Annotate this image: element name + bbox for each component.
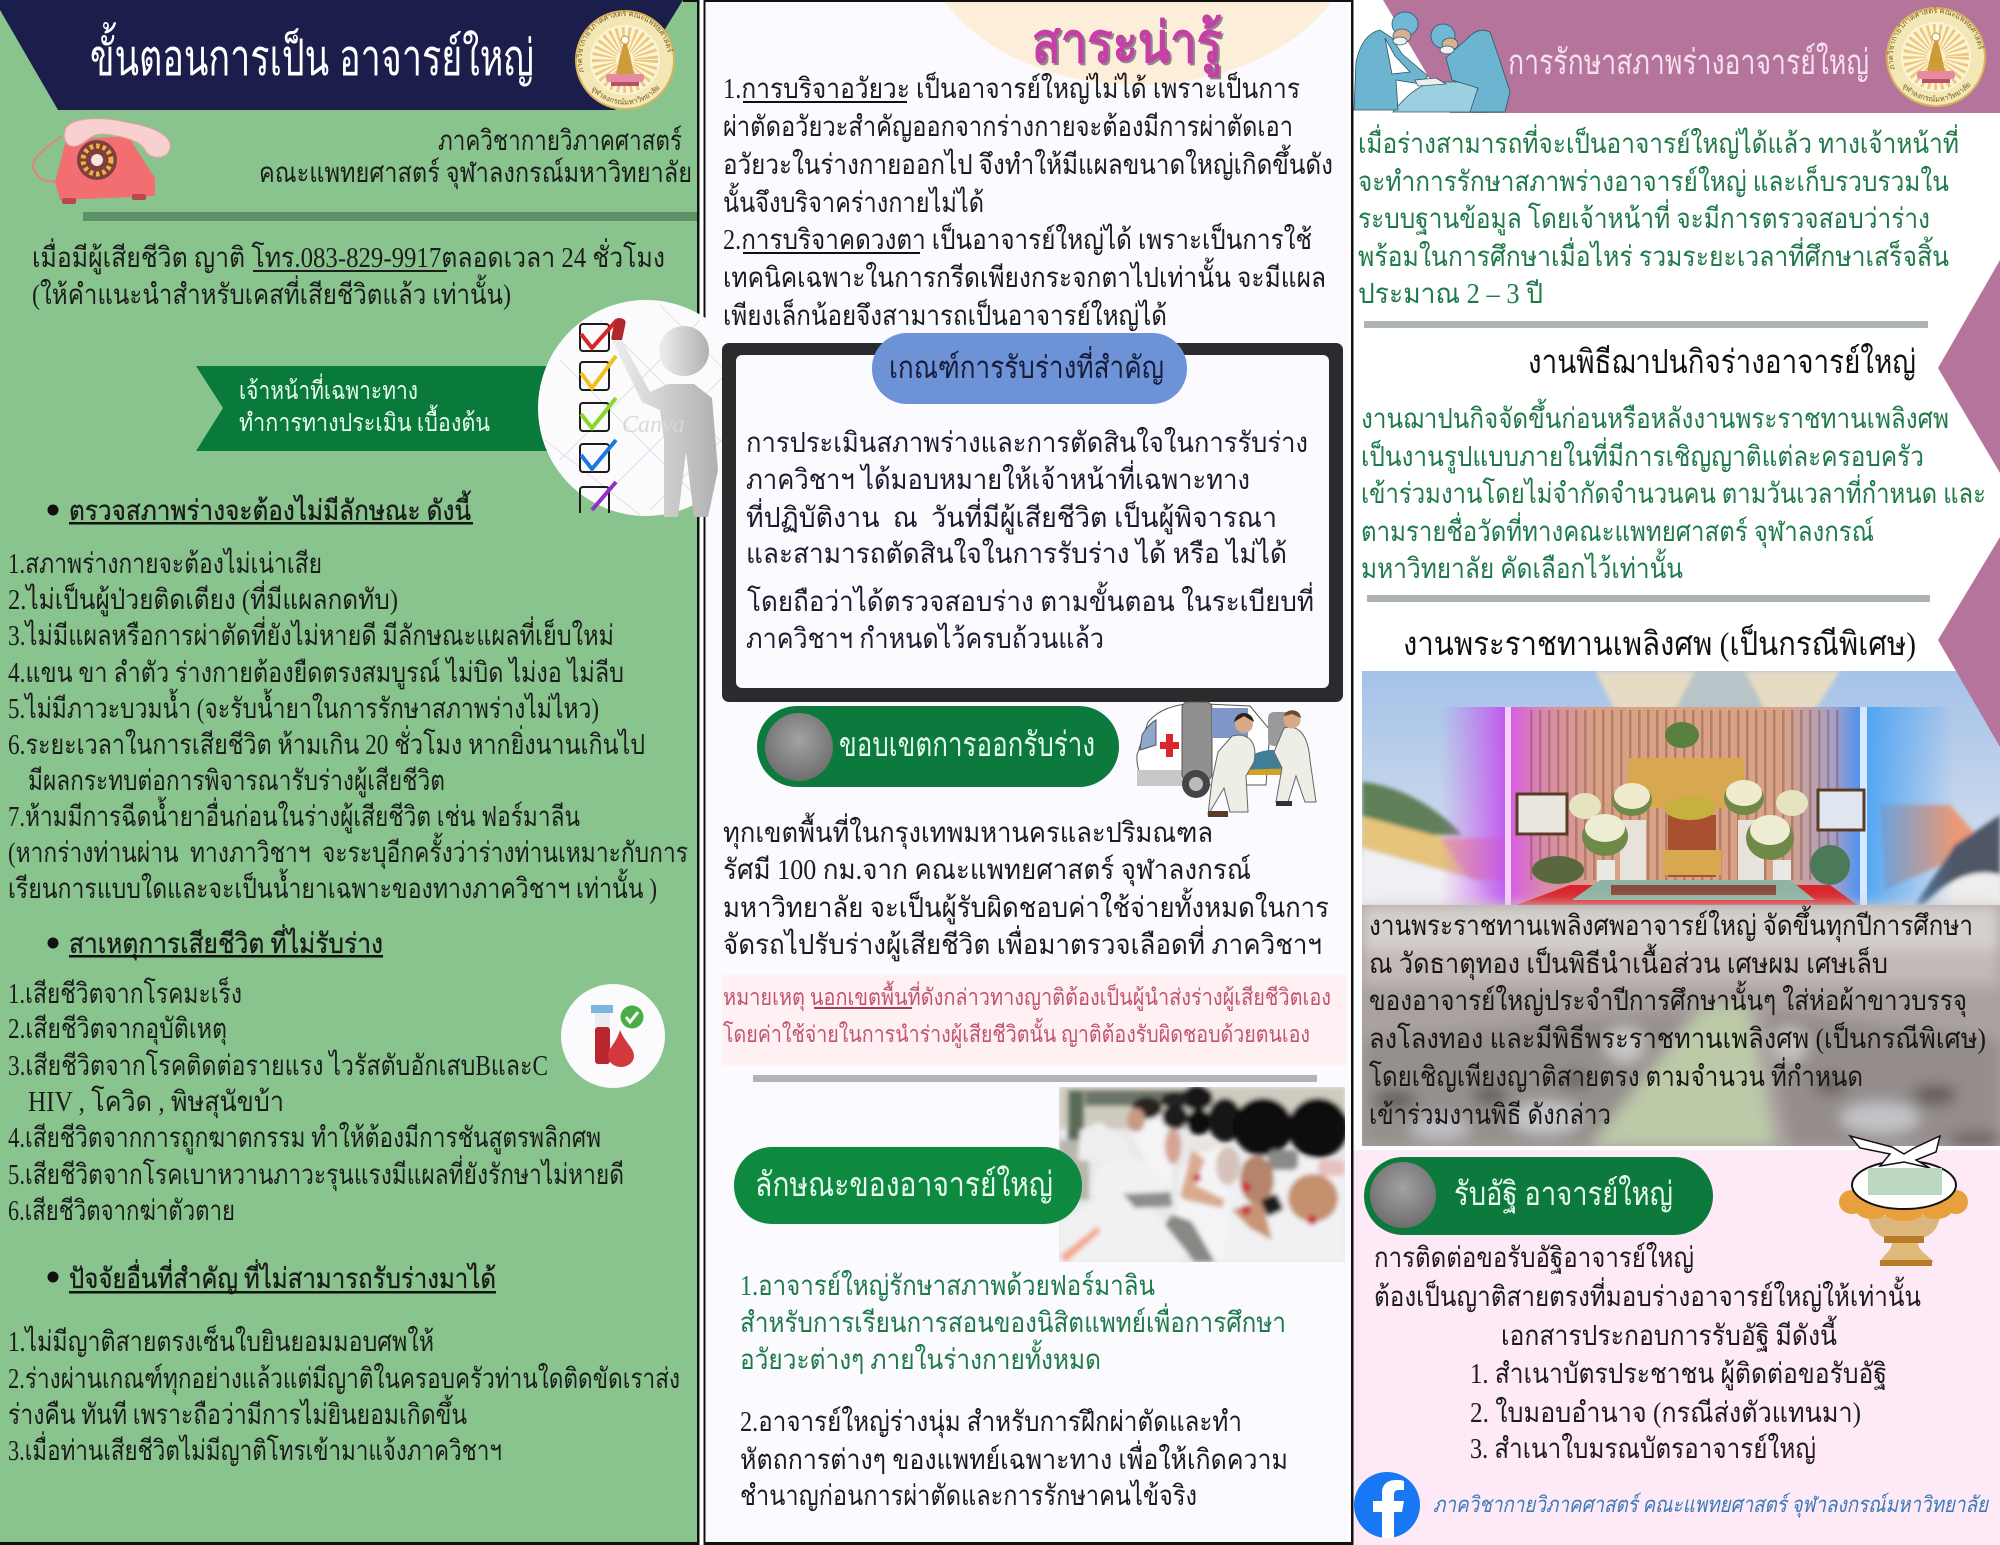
text: ashes documents: การติดต่อขอรับอัฐิอาจารย์ใหญ่	[1374, 1241, 1694, 1274]
list: body conditions: 7.ห้ามมีการฉีดน้ำยาอื่นก่อนในร่างผู้เสียชีวิต เช่น ฟอร์มาลีน	[8, 796, 580, 834]
text: ashes documents: 3. สำเนาใบมรณบัตรอาจารย์ใหญ่	[1470, 1432, 1816, 1465]
illustration: figure ticking checklist	[538, 300, 754, 517]
list: other factors: 1.ไม่มีญาติสายตรงเซ็นใบยินยอมมอบศพให้	[8, 1324, 434, 1358]
text: funeral ceremony: เป็นงานรูปแบบภายในที่มีการเชิญญาติแต่ละครอบครัว	[1361, 437, 1924, 474]
list: body conditions: 4.แขน ขา ลำตัว ร่างกายต้องยืดตรงสมบูรณ์ ไม่บิด ไม่งอ ไม่ลีบ	[8, 657, 624, 690]
list: other factors	[8, 1324, 680, 1467]
title blob	[920, 0, 1356, 85]
title: สาระน่ารู้: สาระน่ารู้	[1034, 13, 1224, 80]
text: donation notes: เทคนิคเฉพาะในการกรีดเพียงกระจกตาไปเท่านั้น จะมีแผล	[723, 257, 1326, 294]
photo: students paying respect	[1059, 1086, 1348, 1262]
heading: other factors: ปัจจัยอื่นที่สำคัญ ที่ไม่สามารถรับร่างมาได้	[69, 1259, 496, 1295]
pill: receive ashes	[1364, 1157, 1713, 1235]
text: donation notes: นั้นจึงบริจาคร่างกายไม่ได้	[723, 182, 984, 219]
note box	[722, 975, 1346, 1065]
list: body conditions: 5.ไม่มีภาวะบวมน้ำ (จะรับน้ำยาในการรักษาสภาพร่างไม่ไหว)	[8, 688, 599, 725]
criteria text: ภาควิชาฯ ได้มอบหมายให้เจ้าหน้าที่เฉพาะทาง	[746, 460, 1250, 496]
list: body conditions: 6.ระยะเวลาในการเสียชีวิต ห้ามเกิน 20 ชั่วโมง หากยิ่งนานเกินไป	[8, 725, 645, 761]
title: สาระน่ารู้: สาระน่ารู้	[1032, 11, 1222, 78]
list: causes of death: HIV , โควิด , พิษสุนัขบ้า	[28, 1085, 284, 1119]
pill: service area	[757, 706, 1119, 787]
icon: ash urn with cloth bundle	[1839, 1136, 1968, 1266]
icon: ambulance	[1137, 702, 1316, 817]
text: donation notes: 2.การบริจาคดวงตา เป็นอาจารย์ใหญ่ได้ เพราะเป็นการใช้	[723, 222, 1312, 256]
ribbon: staff assessment	[196, 366, 560, 451]
panel: centre column content	[722, 0, 1356, 1512]
icon: faculty seal left: ภาควิชากายวิภาคศาสตร์ คณะแพทยศาสตร์	[576, 9, 674, 72]
department address: คณะแพทยศาสตร์ จุฬาลงกรณ์มหาวิทยาลัย	[259, 157, 692, 190]
text: service area: จัดรถไปรับร่างผู้เสียชีวิต เพื่อมาตรวจเลือดที่ ภาควิชาฯ	[723, 925, 1322, 962]
list: other factors: 2.ร่างผ่านเกณฑ์ทุกอย่างแล้วแต่มีญาติในครอบครัวท่านใดติดขัดเราส่ง	[8, 1362, 680, 1396]
panel: centre column background	[704, 0, 1354, 1545]
list: causes of death: 4.เสียชีวิตจากการถูกฆาตกรรม ทำให้ต้องมีการชันสูตรพลิกศพ	[8, 1121, 601, 1155]
criteria text: โดยถือว่าได้ตรวจสอบร่าง ตามขั้นตอน ในระเบียบที่	[747, 581, 1314, 618]
text: service area: มหาวิทยาลัย จะเป็นผู้รับผิดชอบค่าใช้จ่ายทั้งหมดในการ	[723, 887, 1329, 925]
text: royal cremation: เข้าร่วมงานพิธี ดังกล่าว	[1369, 1099, 1611, 1131]
list: body conditions: (หากร่างท่านผ่าน ทางภาวิชาฯ จะระบุอีกครั้งว่าร่างท่านเหมาะกับการ	[8, 832, 688, 870]
pill: service area: ขอบเขตการออกรับร่าง	[839, 727, 1095, 764]
department address	[259, 125, 692, 190]
text: ashes documents	[1374, 1241, 1921, 1465]
criteria text	[746, 426, 1314, 655]
list: other factors: 3.เมื่อท่านเสียชีวิตไม่มีญาติโทรเข้ามาแจ้งภาควิชาฯ	[8, 1431, 502, 1467]
text: characteristic 1: อวัยวะต่างๆ ภายในร่างกายทั้งหมด	[740, 1339, 1101, 1376]
pill: cadaver characteristics	[734, 1147, 1082, 1224]
crowd	[1362, 905, 2000, 1146]
icon: telephone	[33, 119, 170, 204]
list: causes of death: 3.เสียชีวิตจากโรคติดต่อรายแรง ไวรัสตับอักเสบBและC	[8, 1049, 548, 1082]
text: funeral ceremony: มหาวิทยาลัย คัดเลือกไว้เท่านั้น	[1361, 548, 1683, 585]
list: causes of death: 6.เสียชีวิตจากฆ่าตัวตาย	[8, 1195, 235, 1227]
criteria heading pill	[872, 333, 1187, 404]
text: service area: รัศมี 100 กม.จาก คณะแพทยศาสตร์ จุฬาลงกรณ์	[723, 854, 1251, 887]
icon: faculty seal left: จุฬาลงกรณ์มหาวิทยาลัย	[592, 86, 660, 105]
icon: faculty seal right: ภาควิชากายวิภาคศาสตร์ คณะแพทยศาสตร์	[1887, 6, 1985, 70]
ribbon: staff assessment: ทำการทางประเมิน เบื้องต้น	[239, 404, 490, 437]
text: ashes documents: 2. ใบมอบอำนาจ (กรณีส่งตัวแทนมา)	[1470, 1396, 1861, 1429]
icon: surgeons	[1354, 12, 1510, 112]
text: characteristic 2: หัตถการต่างๆ ของแพทย์เฉพาะทาง เพื่อให้เกิดความ	[740, 1440, 1288, 1476]
title: ขั้นตอนการเป็น อาจารย์ใหญ่	[90, 22, 534, 86]
photo: cremation ceremony stage and crowd	[1362, 671, 2000, 1148]
text: characteristic 2: ชำนาญก่อนการผ่าตัดและการรักษาคนไข้จริง	[740, 1480, 1197, 1512]
pill: receive ashes: รับอัฐิ อาจารย์ใหญ่	[1454, 1175, 1673, 1214]
list: body conditions: มีผลกระทบต่อการพิจารณารับร่างผู้เสียชีวิต	[28, 765, 445, 798]
list: causes of death: 1.เสียชีวิตจากโรคมะเร็ง	[8, 976, 242, 1010]
list: body conditions: 1.สภาพร่างกายจะต้องไม่เน่าเสีย	[8, 548, 322, 580]
list: body conditions: 2.ไม่เป็นผู้ป่วยติดเตียง (ที่มีแผลกดทับ)	[8, 580, 398, 617]
pill: cadaver characteristics: ลักษณะของอาจารย์ใหญ่	[755, 1165, 1053, 1204]
text: characteristic 2: 2.อาจารย์ใหญ่ร่างนุ่ม สำหรับการฝึกผ่าตัดและทำ	[740, 1405, 1242, 1439]
text: service area	[723, 812, 1329, 962]
text: characteristic 1	[740, 1269, 1286, 1376]
illustration: figure ticking checklist: Canva	[622, 412, 685, 438]
stage decoration	[1511, 722, 1864, 907]
text: preservation: ประมาณ 2 – 3 ปี	[1358, 278, 1543, 310]
list: causes of death: 2.เสียชีวิตจากอุบัติเหตุ	[8, 1013, 227, 1046]
list: other factors: ร่างคืน ทันที เพราะถือว่ามีการไม่ยินยอมเกิดขึ้น	[8, 1394, 467, 1431]
text: characteristic 1: 1.อาจารย์ใหญ่รักษาสภาพด้วยฟอร์มาลิน	[740, 1269, 1155, 1302]
text: preservation	[1358, 124, 1959, 310]
text: preservation: ระบบฐานข้อมูล โดยเจ้าหน้าที่ จะมีการตรวจสอบว่าร่าง	[1358, 199, 1930, 236]
header banner: mauve	[1383, 0, 2000, 113]
heading: royal cremation: งานพระราชทานเพลิงศพ (เป็นกรณีพิเศษ)	[1403, 624, 1916, 663]
list: causes of death: 5.เสียชีวิตจากโรคเบาหวานภาวะรุนแรงมีแผลที่ยังรักษาไม่หายดี	[8, 1155, 624, 1192]
ribbon: staff assessment: เจ้าหน้าที่เฉพาะทาง	[239, 373, 418, 405]
contact text: เมื่อมีผู้เสียชีวิต ญาติ โทร.083-829-9917ตลอดเวลา 24 ชั่วโมง	[32, 238, 665, 275]
criteria text: ภาควิชาฯ กำหนดไว้ครบถ้วนแล้ว	[746, 623, 1104, 655]
panel: right column content	[1354, 0, 2000, 1538]
text: service area: ทุกเขตพื้นที่ในกรุงเทพมหานครและปริมณฑล	[723, 812, 1213, 850]
text: ashes documents: ต้องเป็นญาติสายตรงที่มอบร่างอาจารย์ใหญ่ให้เท่านั้น	[1374, 1276, 1921, 1313]
text: royal cremation	[1369, 905, 1986, 1131]
text: donation notes: ผ่าตัดอวัยวะสำคัญออกจากร่างกายจะต้องมีการผ่าตัดเอา	[723, 111, 1293, 143]
contact text: (ให้คำแนะนำสำหรับเคสที่เสียชีวิตแล้ว เท่านั้น)	[32, 274, 511, 311]
text: donation notes: 1.การบริจาอวัยวะ เป็นอาจารย์ใหญ่ไม่ได้ เพราะเป็นการ	[723, 71, 1300, 105]
icon: facebook	[1354, 1472, 1420, 1538]
icon: blood tube	[561, 984, 665, 1088]
list: body conditions: เรียนการแบบใดและจะเป็นน้ำยาเฉพาะของทางภาควิชาฯ เท่านั้น )	[8, 868, 657, 905]
header banner: navy	[0, 0, 683, 110]
panel: left column background	[0, 0, 700, 1545]
note box: โดยค่าใช้จ่ายในการนำร่างผู้เสียชีวิตนั้น ญาติต้องรับผิดชอบด้วยตนเอง	[723, 1018, 1310, 1048]
panel: left column content	[0, 0, 697, 1467]
panel: right column background	[1354, 0, 2000, 1545]
criteria frame	[722, 333, 1343, 702]
text: ashes documents: เอกสารประกอบการรับอัฐิ มีดังนี้	[1501, 1315, 1837, 1352]
note box: หมายเหตุ นอกเขตพื้นที่ดังกล่าวทางญาติต้องเป็นผู้นำส่งร่างผู้เสียชีวิตเอง	[723, 981, 1331, 1011]
decorative arrow shapes	[1938, 260, 2000, 747]
heading: body condition: ตรวจสภาพร่างจะต้องไม่มีลักษณะ ดังนี้	[69, 490, 471, 527]
criteria heading pill: เกณฑ์การรับร่างที่สำคัญ	[889, 346, 1164, 385]
list: body conditions	[8, 548, 688, 905]
list: body conditions: 3.ไม่มีแผลหรือการผ่าตัดที่ยังไม่หายดี มีลักษณะแผลที่เย็บใหม่	[8, 616, 614, 652]
criteria text: การประเมินสภาพร่างและการตัดสินใจในการรับร่าง	[746, 426, 1308, 459]
heading: causes of death: สาเหตุการเสียชีวิต ที่ไม่รับร่าง	[69, 924, 383, 961]
text: royal cremation: ณ วัดธาตุทอง เป็นพิธีนำเนื้อส่วน เศษผม เศษเล็บ	[1369, 943, 1888, 981]
text: donation notes: อวัยวะในร่างกายออกไป จึงทำให้มีแผลขนาดใหญ่เกิดขึ้นดัง	[723, 144, 1333, 181]
text: characteristic 2	[740, 1405, 1288, 1512]
text: characteristic 1: สำหรับการเรียนการสอนของนิสิตแพทย์เพื่อการศึกษา	[740, 1303, 1286, 1339]
text: royal cremation: โดยเชิญเพียงญาติสายตรง ตามจำนวน ที่กำหนด	[1369, 1057, 1863, 1093]
icon: faculty seal left	[575, 9, 675, 110]
text: funeral ceremony	[1361, 398, 1986, 585]
icon: faculty seal right	[1886, 6, 1986, 107]
icon: faculty seal right: จุฬาลงกรณ์มหาวิทยาลัย	[1902, 82, 1971, 102]
criteria text: และสามารถตัดสินใจในการรับร่าง ได้ หรือ ไม่ได้	[746, 537, 1287, 570]
title: การรักษาสภาพร่างอาจารย์ใหญ่	[1508, 42, 1869, 82]
criteria text: ที่ปฏิบัติงาน ณ วันที่มีผู้เสียชีวิต เป็นผู้พิจารณา	[746, 498, 1277, 535]
contact text	[32, 238, 665, 311]
heading: funeral ceremony: งานพิธีฌาปนกิจร่างอาจารย์ใหญ่	[1528, 343, 1916, 381]
text: ashes documents: 1. สำเนาบัตรประชาชน ผู้ติดต่อขอรับอัฐิ	[1470, 1359, 1887, 1391]
text: donation notes	[723, 71, 1333, 332]
department address: ภาควิชากายวิภาคศาสตร์	[438, 125, 682, 157]
list: causes of death	[8, 976, 624, 1227]
text: donation notes: เพียงเล็กน้อยจึงสามารถเป็นอาจารย์ใหญ่ได้	[723, 298, 1167, 332]
text: funeral ceremony: ตามรายชื่อวัดที่ทางคณะแพทยศาสตร์ จุฬาลงกรณ์	[1361, 512, 1874, 549]
